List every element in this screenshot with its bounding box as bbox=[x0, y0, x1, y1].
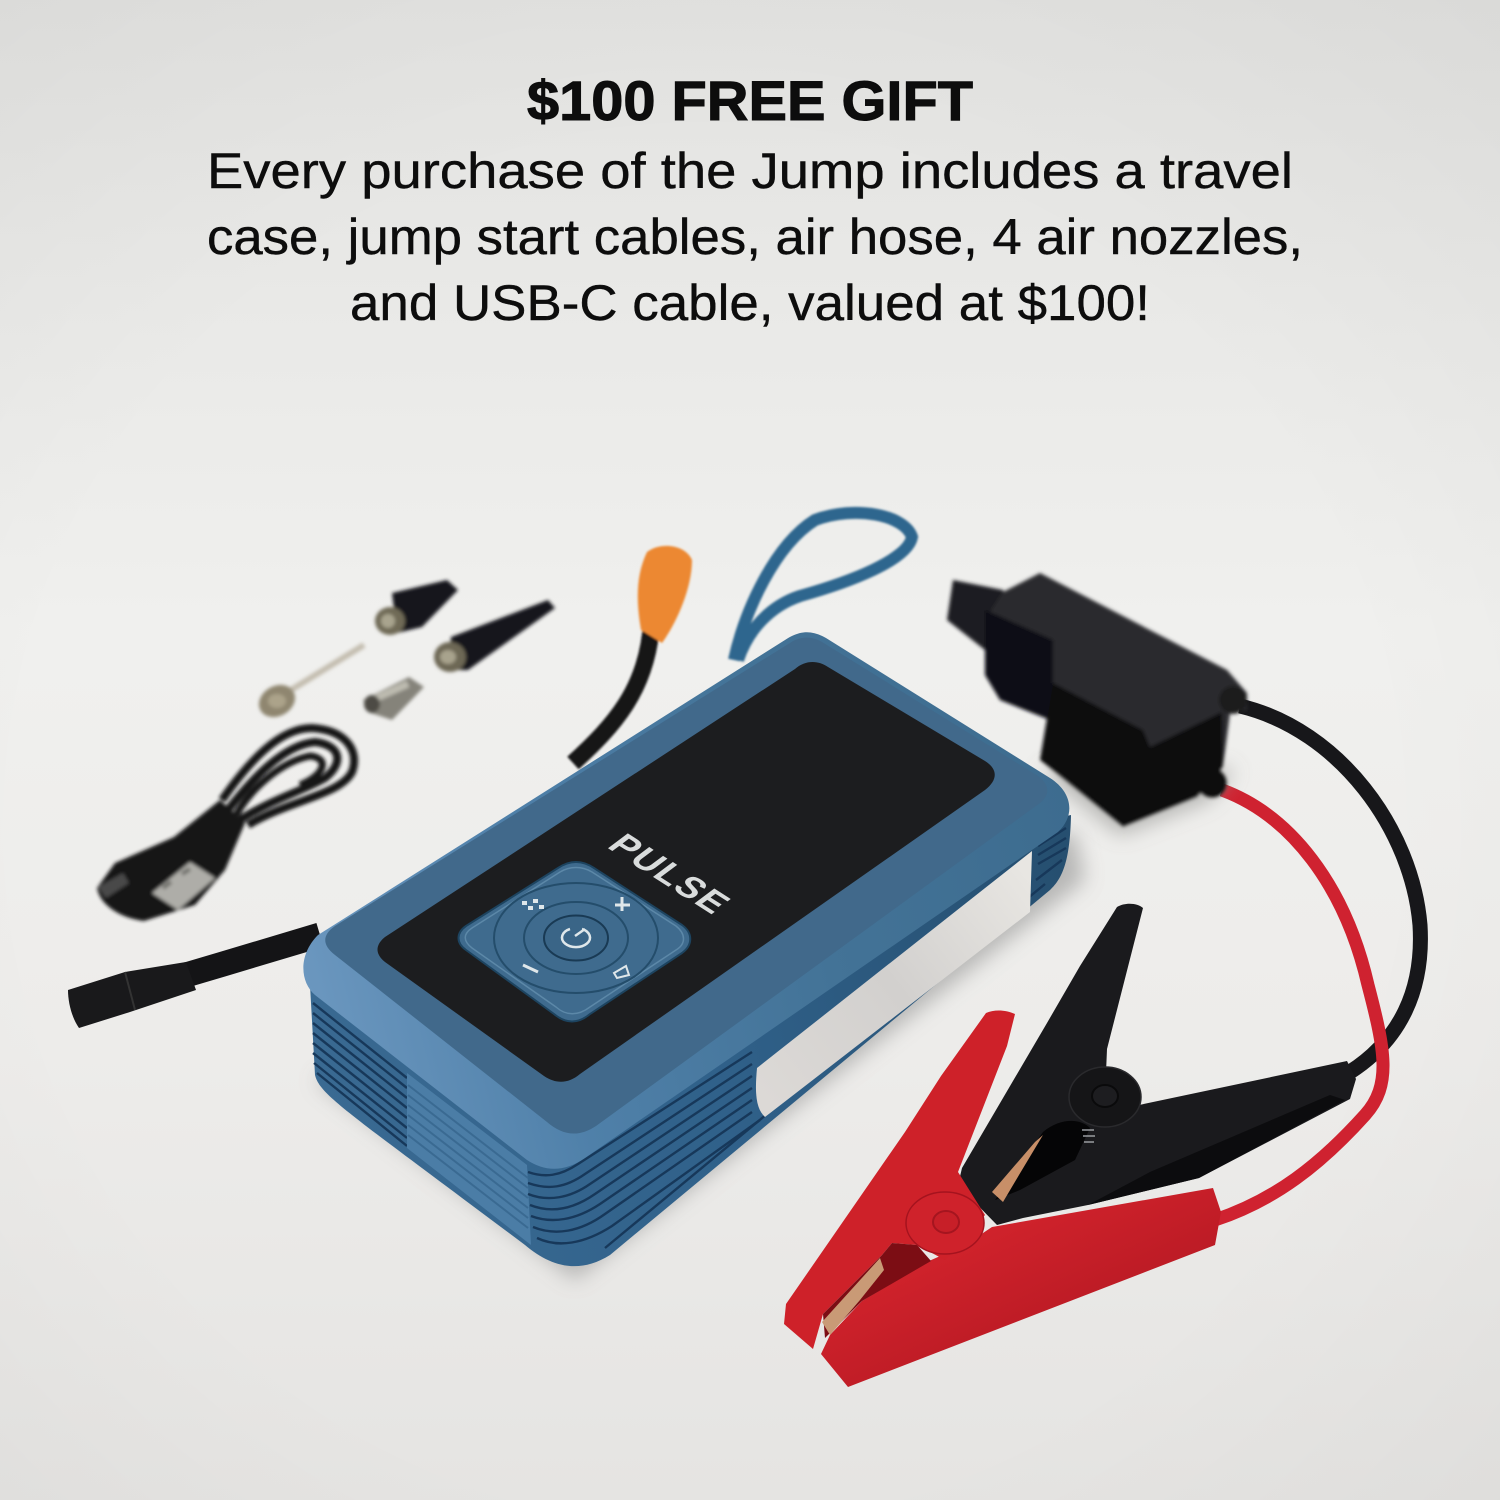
icon: USB-C cable bbox=[97, 728, 354, 921]
device body bbox=[310, 815, 1071, 1266]
icon: minus bbox=[523, 965, 538, 972]
red clamp bbox=[784, 1010, 1221, 1387]
lower jaw bbox=[821, 1188, 1221, 1387]
lid top plane bbox=[325, 638, 1047, 1134]
vent door bbox=[407, 1073, 531, 1245]
right vent ribs bbox=[528, 812, 1066, 1248]
jump cable: black and red wires bbox=[1215, 706, 1420, 1220]
PULSE logo: PULSE bbox=[600, 827, 739, 920]
power station device bbox=[303, 632, 1085, 1280]
black clamp bbox=[958, 904, 1356, 1225]
upper jaw bbox=[784, 1010, 1015, 1349]
black panel bbox=[378, 662, 995, 1082]
description text: case, jump start cables, air hose, 4 air nozzles, bbox=[207, 209, 1303, 265]
icon: air nozzles bbox=[253, 580, 555, 723]
heading: $100 FREE GIFT bbox=[527, 69, 973, 132]
spring bbox=[1082, 1130, 1095, 1142]
control pad bbox=[458, 862, 690, 1022]
door ribs bbox=[408, 1085, 528, 1228]
icon: flashlight bbox=[614, 966, 629, 978]
icon: power bbox=[562, 929, 590, 947]
icon: plus bbox=[615, 897, 630, 911]
jaw opening bbox=[823, 1243, 931, 1338]
lid chamfer bbox=[303, 632, 1069, 1169]
jump starter smart clamp box bbox=[947, 573, 1247, 835]
device shadow bbox=[315, 830, 1085, 1280]
pivot bbox=[906, 1192, 984, 1254]
copper contact bbox=[822, 1258, 884, 1335]
LED light strip bbox=[756, 851, 1032, 1117]
air hose with orange connector bbox=[68, 546, 692, 1028]
description text: and USB-C cable, valued at $100! bbox=[350, 275, 1150, 331]
icon: dots bbox=[522, 901, 544, 908]
left vent ribs bbox=[313, 1003, 407, 1146]
clamp underside bbox=[1088, 1095, 1345, 1205]
description text: Every purchase of the Jump includes a travel bbox=[207, 143, 1293, 199]
copper contact bbox=[992, 1135, 1043, 1202]
description text bbox=[207, 143, 1303, 331]
wrist strap bbox=[734, 513, 912, 660]
